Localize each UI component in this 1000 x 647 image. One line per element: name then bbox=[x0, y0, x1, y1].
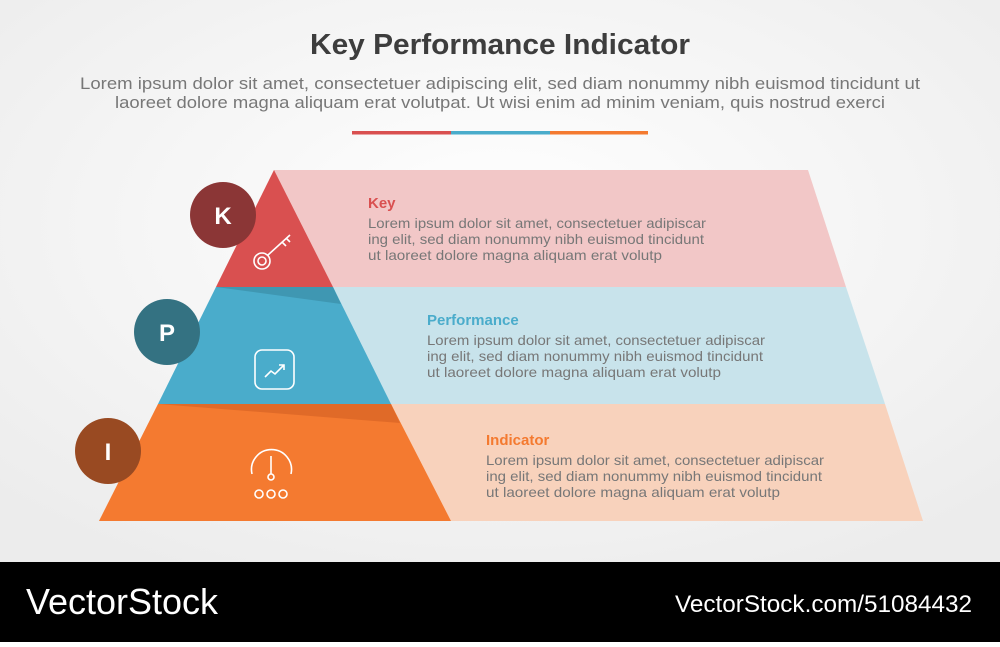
panel: performance band: ut laoreet dolore magna aliquam erat volutp bbox=[427, 364, 721, 380]
subtitle text bbox=[80, 75, 920, 112]
circle I bbox=[75, 418, 141, 484]
panel: performance band: ing elit, sed diam nonummy nibh euismod tincidunt bbox=[427, 348, 763, 364]
footer bar bbox=[0, 562, 1000, 642]
panel: key band: Lorem ipsum dolor sit amet, consectetuer adipiscar bbox=[368, 215, 706, 231]
circle I: I bbox=[105, 439, 111, 466]
circle K: K bbox=[214, 203, 232, 230]
panel: performance band: Lorem ipsum dolor sit amet, consectetuer adipiscar bbox=[427, 332, 765, 348]
heading: Performance: Performance bbox=[427, 312, 519, 329]
panel: key band: ut laoreet dolore magna aliquam erat volutp bbox=[368, 247, 662, 263]
title: Key Performance Indicator bbox=[310, 29, 690, 61]
circle P bbox=[134, 299, 200, 365]
icon: chart bbox=[255, 350, 294, 389]
panel: indicator band: Lorem ipsum dolor sit amet, consectetuer adipiscar bbox=[486, 452, 824, 468]
icon: gauge bbox=[252, 450, 292, 498]
panel: key band bbox=[216, 170, 846, 287]
footer bar: VectorStock.com/51084432 bbox=[675, 591, 972, 618]
panel: indicator band: ing elit, sed diam nonummy nibh euismod tincidunt bbox=[486, 468, 822, 484]
heading: Indicator: Indicator bbox=[486, 432, 550, 449]
footer bar: VectorStock bbox=[26, 581, 219, 622]
divider accent bbox=[352, 131, 648, 134]
icon: key bbox=[254, 235, 290, 269]
panel: indicator band: ut laoreet dolore magna aliquam erat volutp bbox=[486, 484, 780, 500]
circle K bbox=[190, 182, 256, 248]
panel: indicator band bbox=[99, 404, 923, 521]
subtitle text: Lorem ipsum dolor sit amet, consectetuer adipiscing elit, sed diam nonummy nibh euismod tincidunt ut bbox=[80, 75, 920, 93]
circle P: P bbox=[159, 320, 175, 347]
panel: performance band bbox=[158, 287, 885, 404]
heading: Key: Key bbox=[368, 195, 396, 212]
subtitle text: laoreet dolore magna aliquam erat volutpat. Ut wisi enim ad minim veniam, quis nostrud exerci bbox=[115, 94, 885, 112]
panel: key band: ing elit, sed diam nonummy nibh euismod tincidunt bbox=[368, 231, 704, 247]
